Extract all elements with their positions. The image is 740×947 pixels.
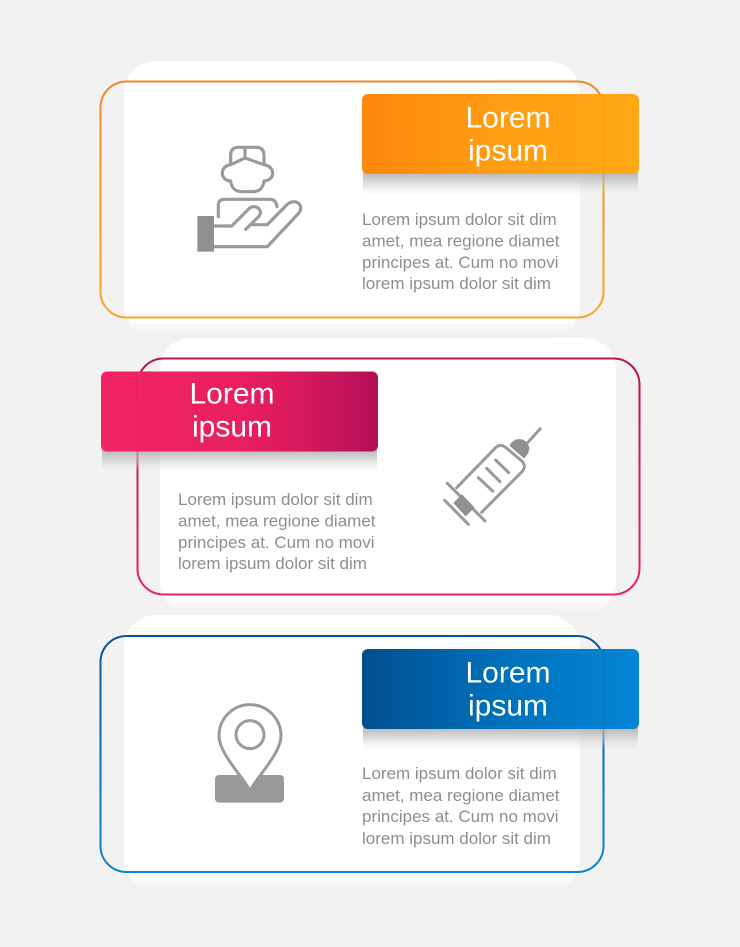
- body text 3: amet, mea regione diamet: [362, 786, 560, 805]
- body text 1: lorem ipsum dolor sit dim: [362, 274, 551, 293]
- body text 3: lorem ipsum dolor sit dim: [362, 829, 551, 848]
- body text 2: Lorem ipsum dolor sit dim: [178, 490, 373, 509]
- body text 2: principes at. Cum no movi: [178, 533, 375, 552]
- white card 1: [124, 61, 580, 337]
- panel: step 2: [101, 338, 640, 614]
- body text 3: Lorem ipsum dolor sit dim: [362, 764, 557, 783]
- body text 2: lorem ipsum dolor sit dim: [178, 554, 367, 573]
- body text 1: amet, mea regione diamet: [362, 232, 560, 250]
- icon: caregiver in hand: [197, 147, 301, 252]
- white card 2: [160, 338, 616, 614]
- body text 3: principes at. Cum no movi: [362, 807, 559, 826]
- body text 2: [178, 490, 376, 573]
- panel: step 1: [100, 61, 639, 337]
- orange outline frame: [100, 82, 604, 318]
- blue outline frame: [100, 636, 604, 872]
- panel: step 3: [100, 615, 639, 891]
- orange banner: [362, 94, 639, 174]
- banner shadow: [363, 168, 638, 194]
- body text 1: principes at. Cum no movi: [362, 253, 559, 272]
- body text 2: amet, mea regione diamet: [178, 512, 376, 530]
- banner shadow: [102, 445, 377, 471]
- white card 3: [124, 615, 580, 891]
- blue banner: ipsum: [468, 690, 548, 722]
- body text 3: [362, 764, 560, 848]
- banner shadow: [363, 723, 638, 749]
- pink banner: Lorem: [189, 378, 275, 410]
- pink banner: ipsum: [192, 410, 272, 444]
- icon: location pin: [215, 705, 284, 803]
- pink outline frame: [138, 358, 640, 594]
- blue banner: Lorem: [465, 656, 551, 690]
- blue banner: [362, 649, 639, 729]
- orange banner: ipsum: [468, 134, 548, 168]
- body text 1: [362, 210, 560, 293]
- icon: syringe: [445, 429, 540, 524]
- orange banner: Lorem: [465, 102, 551, 134]
- body text 1: Lorem ipsum dolor sit dim: [362, 210, 557, 229]
- pink banner: [101, 372, 378, 452]
